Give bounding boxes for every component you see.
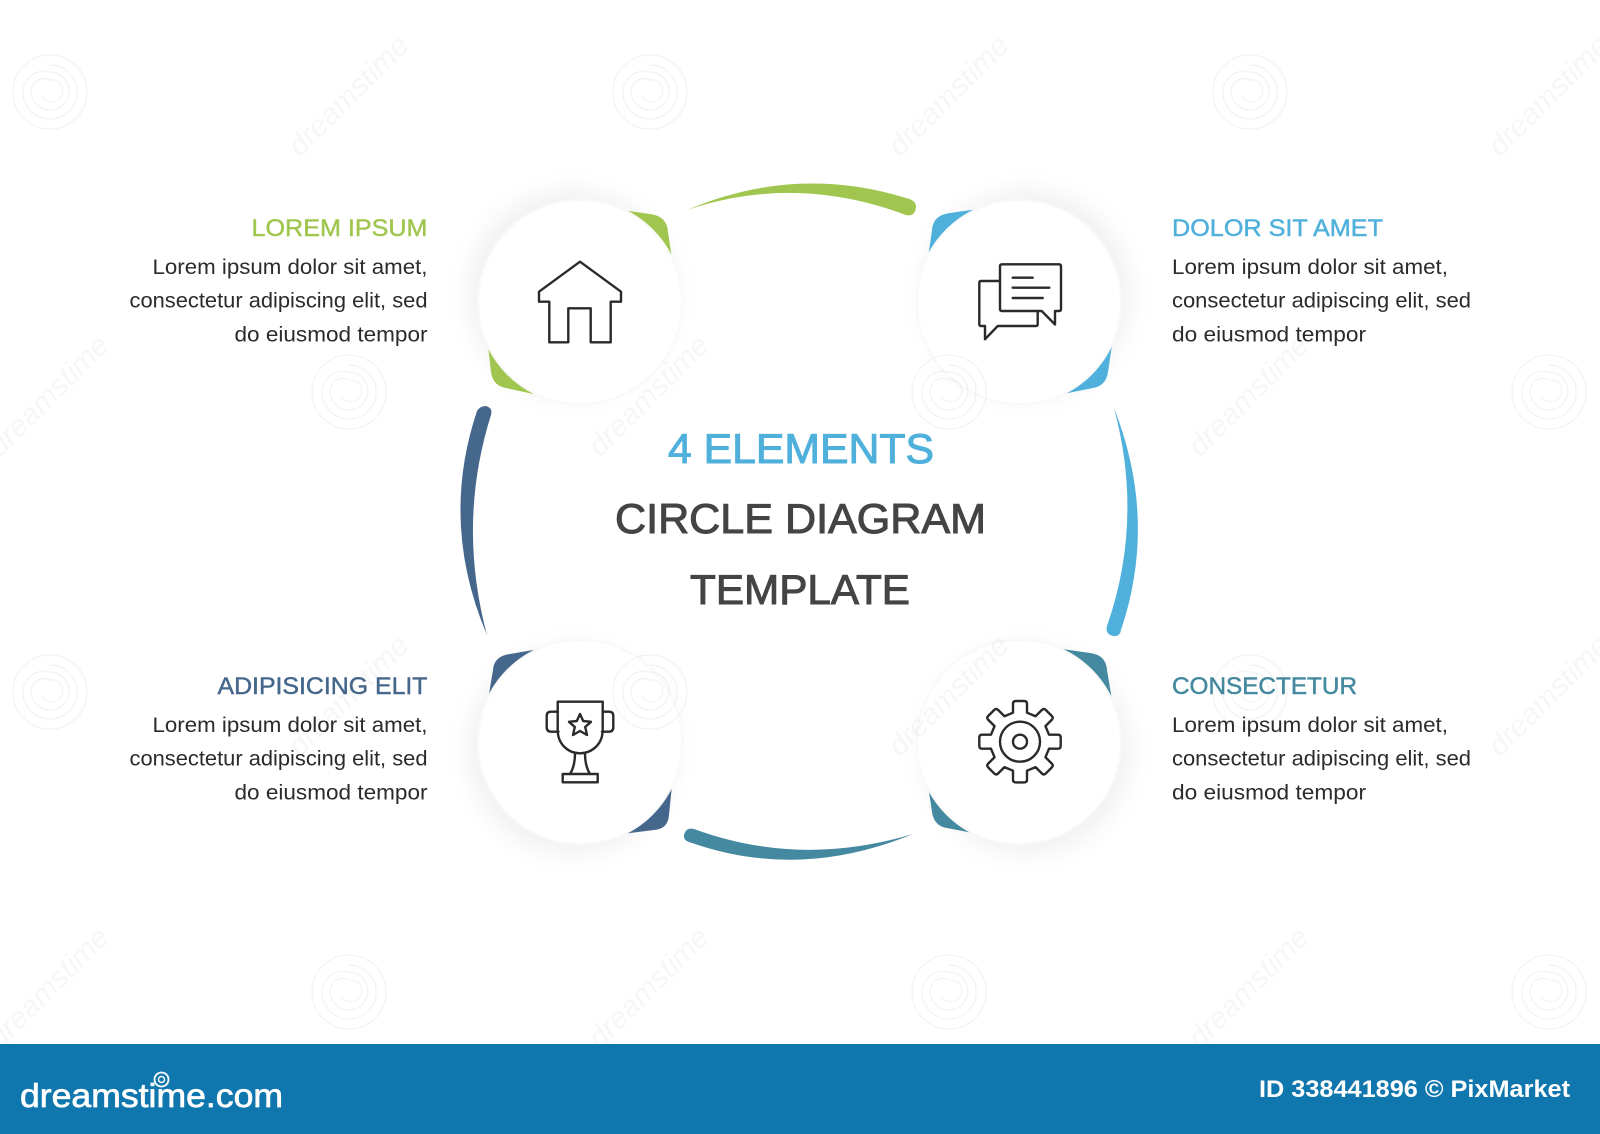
footer credit: ID 338441896 © PixMarket <box>1259 1076 1570 1103</box>
text block: lorem ipsum: LOREM IPSUM <box>252 215 428 242</box>
center title: CIRCLE DIAGRAM <box>615 495 986 542</box>
icon: house <box>539 262 621 342</box>
text block: lorem ipsum: do eiusmod tempor <box>234 324 428 346</box>
center title <box>615 425 986 613</box>
footer logo: dreamstime.com <box>20 1077 283 1114</box>
text block: consectetur: CONSECTETUR <box>1172 673 1357 700</box>
text block: consectetur <box>1172 673 1471 804</box>
watermark pattern: dreamstime <box>1182 329 1316 463</box>
text block: dolor sit amet <box>1172 215 1471 346</box>
text block: consectetur: Lorem ipsum dolor sit amet, <box>1172 714 1448 737</box>
panel: circle diagram <box>460 184 1138 860</box>
icon: trophy <box>547 702 613 782</box>
node: green home circle <box>469 191 682 404</box>
text block: lorem ipsum: Lorem ipsum dolor sit amet, <box>152 256 428 279</box>
watermark pattern: dreamstime <box>882 29 1016 163</box>
text block: lorem ipsum <box>130 215 428 346</box>
watermark pattern: dreamstime <box>582 921 716 1055</box>
arc: navy left segment <box>460 406 491 635</box>
footer band <box>0 1044 1600 1134</box>
arc: green top segment <box>687 184 916 215</box>
watermark pattern: dreamstime <box>282 29 416 163</box>
text block: adipisicing elit: consectetur adipiscing elit, sed <box>130 748 428 770</box>
center title: 4 ELEMENTS <box>668 425 934 472</box>
text block: dolor sit amet: DOLOR SIT AMET <box>1172 215 1383 242</box>
text block: adipisicing elit: do eiusmod tempor <box>234 782 428 804</box>
arc: blue right segment <box>1107 408 1138 636</box>
icon: gear <box>979 701 1061 782</box>
arc: teal bottom segment <box>684 829 913 860</box>
watermark pattern: dreamstime <box>882 629 1016 763</box>
text block: adipisicing elit: Lorem ipsum dolor sit amet, <box>152 714 428 737</box>
text block: consectetur: consectetur adipiscing elit, sed <box>1172 748 1471 770</box>
text block: consectetur: do eiusmod tempor <box>1172 782 1366 804</box>
text block: dolor sit amet: do eiusmod tempor <box>1172 324 1366 346</box>
text block: adipisicing elit: ADIPISICING ELIT <box>218 673 428 700</box>
node: blue chat circle <box>917 191 1130 404</box>
text block: dolor sit amet: Lorem ipsum dolor sit amet, <box>1172 256 1448 279</box>
icon: chat bubbles <box>979 264 1061 339</box>
text block: dolor sit amet: consectetur adipiscing elit, sed <box>1172 290 1471 312</box>
text block: lorem ipsum: consectetur adipiscing elit, sed <box>130 290 428 312</box>
node: teal gear circle <box>917 640 1130 853</box>
text block: adipisicing elit <box>130 673 428 804</box>
watermark pattern: dreamstime <box>582 329 716 463</box>
center title: TEMPLATE <box>690 566 910 613</box>
watermark pattern: dreamstime <box>1182 921 1316 1055</box>
watermark pattern: dreamstime <box>282 629 416 763</box>
node: navy trophy circle <box>469 640 682 853</box>
